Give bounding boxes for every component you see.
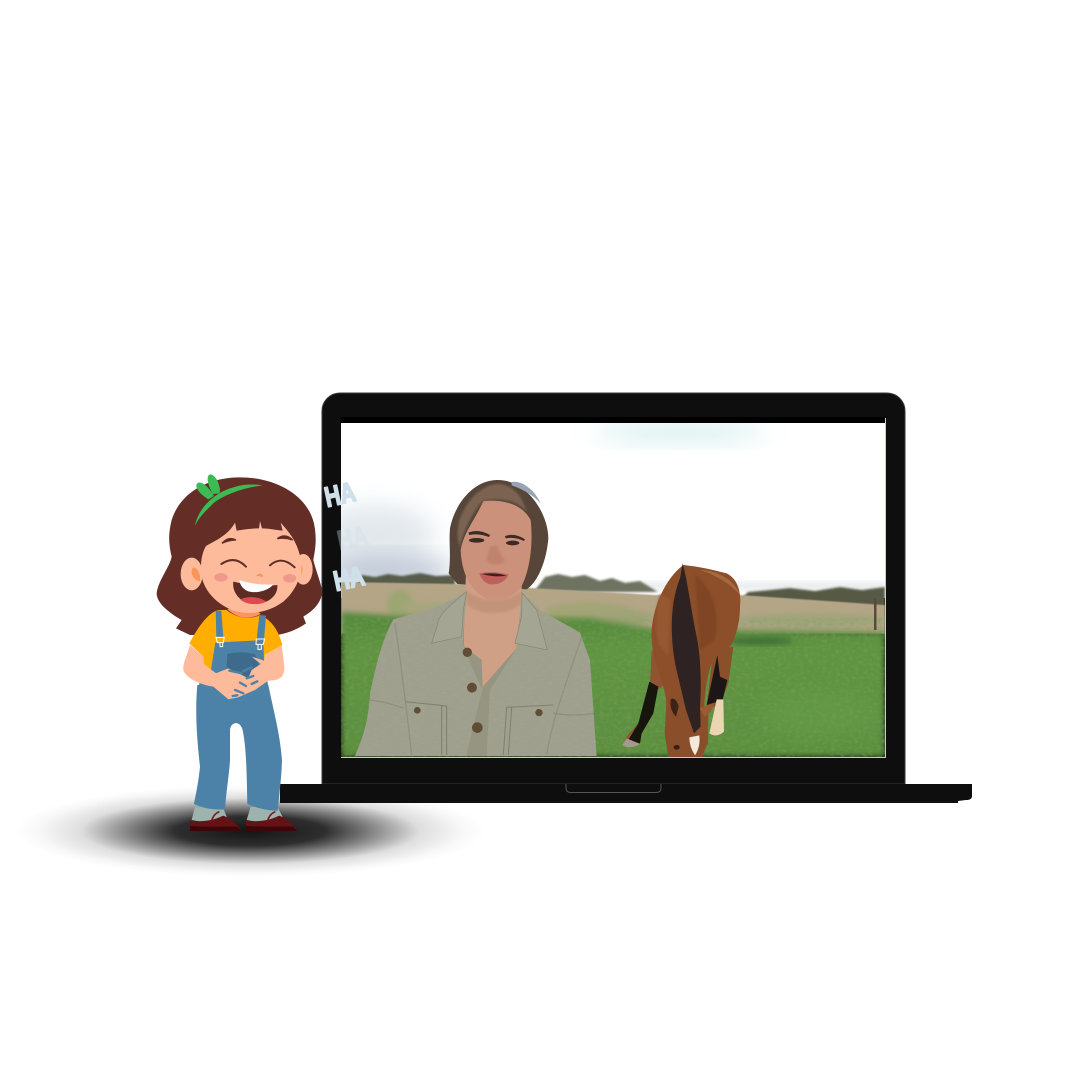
field [341, 582, 885, 634]
near hind leg [622, 650, 663, 747]
sky [341, 423, 885, 598]
eyebrows [222, 536, 293, 543]
tail [672, 563, 701, 733]
ears [670, 699, 679, 717]
HA middle: HA [335, 521, 370, 557]
sleeve seams [370, 623, 595, 755]
legs and shoes [190, 685, 297, 831]
mouth [479, 572, 509, 584]
laptop lid [322, 393, 905, 784]
neck shadow [466, 592, 521, 613]
shirt [355, 592, 597, 756]
face [201, 521, 301, 613]
buttons [414, 648, 543, 733]
neck [463, 573, 522, 688]
horse eye [674, 745, 680, 750]
horse far legs [707, 647, 733, 735]
HA top: HA [322, 476, 358, 514]
shoe straps [211, 812, 275, 822]
nose [487, 546, 504, 564]
girl character [157, 474, 322, 831]
hair highlights [458, 484, 527, 547]
headband leaves [196, 474, 220, 499]
placket [463, 645, 517, 756]
laptop base [280, 784, 972, 803]
cheeks [214, 573, 228, 582]
arms and hands [183, 645, 284, 699]
eyes [468, 531, 525, 545]
shirt texture [374, 642, 596, 752]
headband [195, 484, 263, 526]
grass [341, 612, 885, 757]
white sock [709, 699, 724, 735]
reeds [387, 590, 888, 627]
straps [216, 611, 266, 640]
horse body [652, 565, 740, 710]
video bottom edge [341, 418, 886, 758]
hair back [449, 480, 548, 589]
ground shadow [15, 785, 485, 877]
HA bottom: HA [331, 560, 367, 598]
overall legs [194, 685, 282, 811]
tongue [240, 597, 266, 604]
face [461, 501, 532, 600]
neck [227, 607, 261, 618]
mouth [233, 582, 277, 604]
overall bib [197, 640, 271, 701]
closed eyes [221, 560, 295, 567]
horse [622, 563, 740, 757]
buckles [216, 637, 265, 649]
pockets [405, 702, 553, 755]
grass texture [341, 618, 885, 757]
blaze [689, 735, 700, 755]
socks [192, 807, 283, 823]
teeth [239, 580, 273, 592]
ears [181, 558, 203, 590]
laptop [280, 393, 972, 803]
tree line [352, 573, 885, 606]
video frame [315, 422, 888, 757]
shirt [189, 610, 282, 670]
fence post [874, 598, 876, 630]
trackpad notch [566, 784, 661, 792]
collar [432, 592, 547, 650]
laughter text HA [322, 476, 370, 598]
finger lines [229, 667, 257, 696]
hair [157, 477, 322, 635]
nose [256, 574, 263, 578]
horse head [664, 702, 708, 757]
camera bar [341, 417, 885, 423]
woman [355, 480, 597, 756]
shoes [190, 816, 297, 831]
